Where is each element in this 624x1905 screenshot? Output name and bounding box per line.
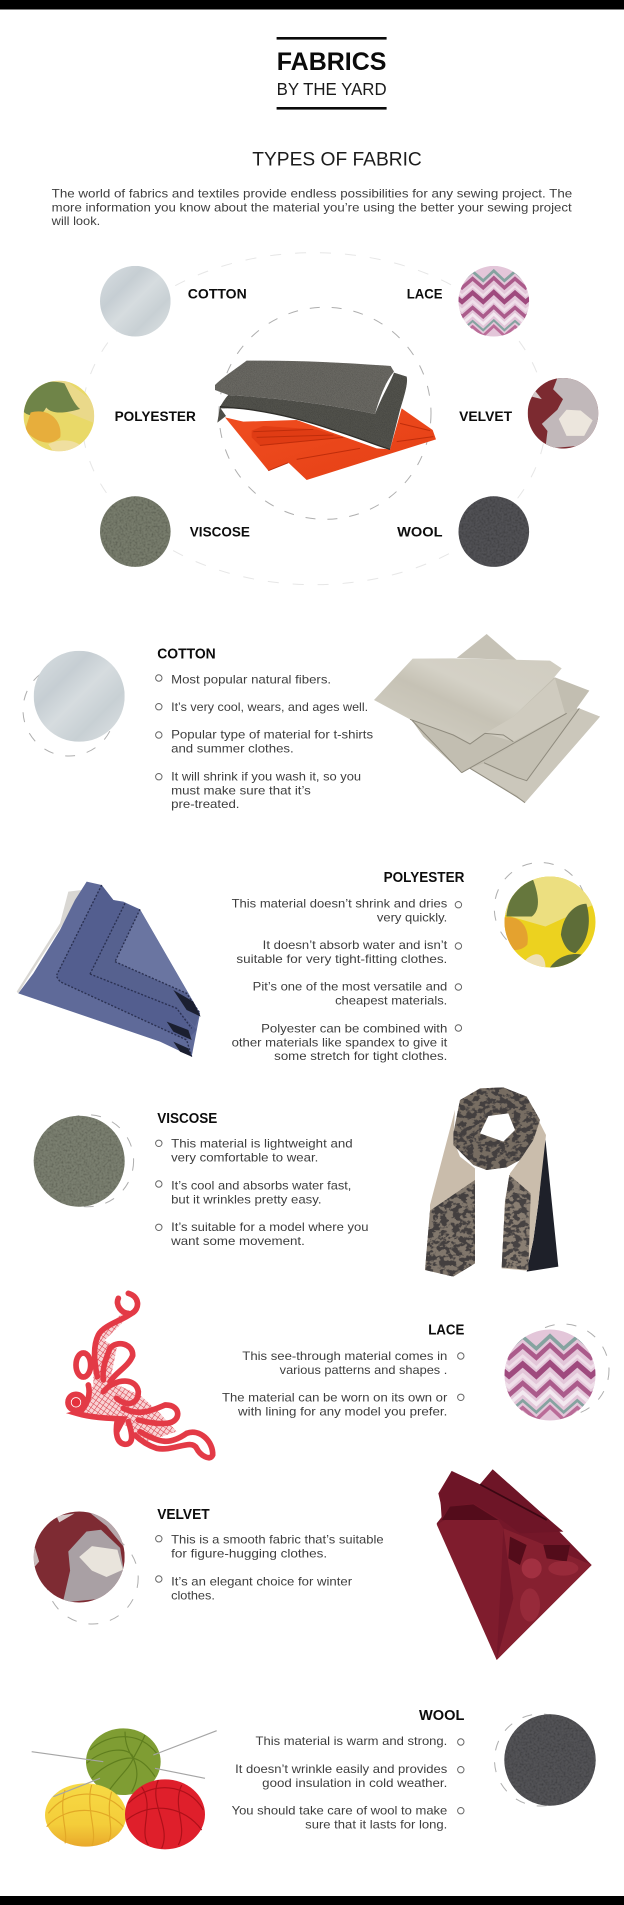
intro paragraph	[51, 186, 573, 228]
swatch: velvet	[459, 378, 598, 449]
polyester swatch	[504, 876, 596, 968]
swatch: wool: WOOL	[397, 524, 442, 540]
cotton swatch	[34, 651, 125, 742]
swatch: viscose	[100, 496, 250, 567]
polyester bullets: It doesn’t absorb water and isn’t	[263, 938, 448, 952]
viscose bullets: very comfortable to wear.	[171, 1150, 318, 1164]
polyester bullets: suitable for very tight-fitting clothes.	[236, 952, 447, 966]
lace bullets: with lining for any model you prefer.	[237, 1405, 447, 1419]
panel: cotton	[23, 634, 600, 811]
velvet heading: VELVET	[157, 1507, 210, 1523]
velvet swatch	[34, 1512, 125, 1602]
wool bullets: It doesn’t wrinkle easily and provides	[235, 1762, 447, 1776]
cotton bullets	[156, 672, 373, 811]
cotton bullets: Most popular natural fibers.	[171, 672, 331, 686]
panel: velvet	[34, 1469, 592, 1660]
polyester bullets: very quickly.	[377, 910, 447, 924]
wool swatch	[504, 1714, 596, 1806]
cotton bullets: pre-treated.	[171, 797, 240, 811]
polyester bullets: This material doesn’t shrink and dries	[232, 897, 447, 911]
wool bullets: You should take care of wool to make	[232, 1803, 448, 1817]
viscose heading: VISCOSE	[157, 1111, 218, 1127]
swatch: polyester: POLYESTER	[115, 409, 196, 424]
viscose bullets: but it wrinkles pretty easy.	[171, 1192, 322, 1206]
cotton heading: COTTON	[157, 647, 216, 663]
lace heading: LACE	[428, 1323, 465, 1339]
intro paragraph: will look.	[51, 214, 100, 228]
cotton bullets: and summer clothes.	[171, 741, 294, 755]
wool bullets	[232, 1734, 464, 1831]
swatch: velvet: VELVET	[459, 409, 513, 424]
logo: FABRICS	[277, 48, 386, 76]
velvet cloth photo	[437, 1469, 592, 1660]
velvet bullets	[156, 1533, 384, 1602]
viscose bullets: It’s cool and absorbs water fast,	[171, 1178, 351, 1192]
polyester bullets: cheapest materials.	[335, 994, 447, 1008]
viscose bullets: It’s suitable for a model where you	[171, 1220, 368, 1234]
wool bullets: sure that it lasts for long.	[305, 1817, 447, 1831]
polyester bullets: Pit’s one of the most versatile and	[253, 980, 447, 994]
title: TYPES OF FABRIC	[252, 148, 422, 170]
viscose bullets	[156, 1136, 368, 1248]
polyester bullets	[232, 897, 462, 1063]
top black bar	[0, 0, 624, 10]
lace bullets: The material can be worn on its own or	[222, 1391, 447, 1405]
panel: wool	[32, 1708, 596, 1849]
polyester bullets: Polyester can be combined with	[261, 1021, 447, 1035]
viscose swatch	[34, 1116, 125, 1207]
panel: viscose	[34, 1087, 558, 1278]
polyester heading: POLYESTER	[384, 870, 465, 886]
panel: lace	[68, 1293, 609, 1458]
lace applique photo	[68, 1293, 213, 1458]
swatch: viscose: VISCOSE	[190, 524, 250, 540]
intro paragraph: The world of fabrics and textiles provide endless possibilities for any sewing project. The	[52, 186, 573, 200]
swatch: polyester	[24, 381, 196, 455]
wool bullets: good insulation in cold weather.	[262, 1776, 447, 1790]
swatch: lace: LACE	[407, 286, 442, 302]
scarf photo	[423, 1087, 558, 1278]
swatch: lace	[407, 266, 536, 336]
polyester cloth photo	[17, 882, 201, 1057]
viscose bullets: want some movement.	[170, 1234, 305, 1248]
swatch: wool	[397, 496, 529, 567]
viscose bullets: This material is lightweight and	[171, 1136, 353, 1150]
lace bullets: various patterns and shapes .	[280, 1363, 447, 1377]
logo: BY THE YARD	[277, 79, 387, 99]
velvet bullets: This is a smooth fabric that’s suitable	[171, 1533, 384, 1547]
velvet bullets: clothes.	[171, 1588, 215, 1602]
lace swatch	[495, 1330, 605, 1420]
central fabric photo	[215, 361, 436, 480]
panel: polyester	[17, 862, 595, 1063]
lace bullets: This see-through material comes in	[242, 1349, 447, 1363]
velvet bullets: It’s an elegant choice for winter	[171, 1574, 352, 1588]
lace bullets	[222, 1349, 464, 1419]
cotton bullets: It’s very cool, wears, and ages well.	[171, 700, 368, 714]
velvet bullets: for figure-hugging clothes.	[171, 1547, 327, 1561]
cotton napkin photo	[374, 634, 600, 803]
wool bullets: This material is warm and strong.	[256, 1734, 447, 1748]
cotton bullets: It will shrink if you wash it, so you	[171, 769, 361, 783]
intro paragraph: more information you know about the material you’re using the better your sewing project	[52, 200, 572, 214]
wool heading: WOOL	[419, 1708, 465, 1724]
cotton bullets: must make sure that it’s	[171, 783, 311, 797]
bottom black bar	[0, 1896, 624, 1905]
polyester bullets: other materials like spandex to give it	[232, 1035, 448, 1049]
swatch: cotton	[100, 266, 247, 336]
swatch: cotton: COTTON	[188, 286, 247, 302]
polyester bullets: some stretch for tight clothes.	[274, 1049, 447, 1063]
logo	[277, 37, 387, 110]
yarn balls photo	[32, 1728, 217, 1849]
overview diagram	[24, 253, 598, 585]
cotton bullets: Popular type of material for t-shirts	[171, 728, 373, 742]
